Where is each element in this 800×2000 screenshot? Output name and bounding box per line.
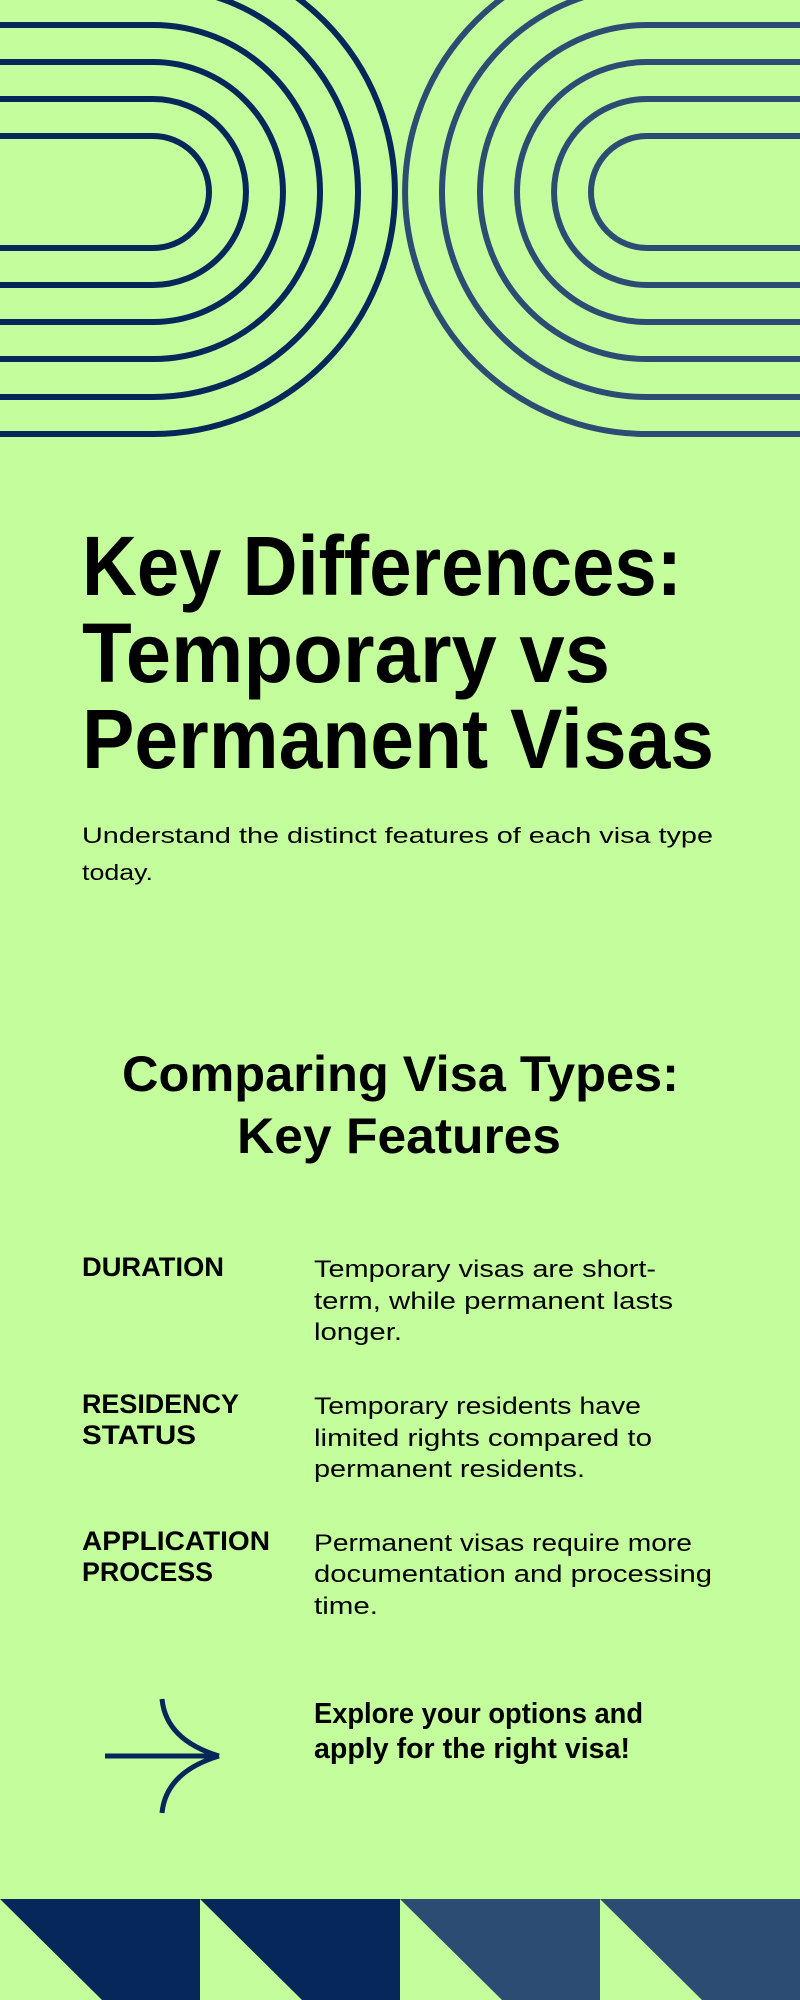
- call to action: [314, 1698, 643, 1765]
- row: duration: term, while permanent lasts: [314, 1288, 673, 1315]
- subtitle: Understand the distinct features of each visa type: [82, 823, 713, 848]
- decoration: left concentric arcs: [0, 0, 395, 434]
- call to action: apply for the right visa!: [314, 1733, 630, 1765]
- title: Permanent Visas: [82, 692, 714, 786]
- row: application process: [82, 1526, 712, 1620]
- row: residency status: Temporary residents have: [314, 1393, 641, 1420]
- title: [82, 519, 714, 786]
- section heading: [122, 1046, 679, 1164]
- call to action: Explore your options and: [314, 1698, 643, 1730]
- subtitle: today.: [82, 860, 153, 885]
- row: duration: DURATION: [82, 1252, 224, 1282]
- section heading: Comparing Visa Types:: [122, 1046, 679, 1102]
- row: application process: Permanent visas require more: [314, 1530, 692, 1557]
- row: duration: Temporary visas are short-: [314, 1256, 656, 1283]
- row: application process: PROCESS: [82, 1557, 213, 1587]
- title: Key Differences:: [82, 519, 682, 613]
- row: residency status: [82, 1389, 652, 1483]
- row: application process: APPLICATION: [82, 1526, 270, 1556]
- row: residency status: limited rights compared to: [314, 1425, 652, 1452]
- decoration: bottom triangle band: [0, 1899, 800, 2000]
- row: residency status: RESIDENCY: [82, 1389, 239, 1419]
- row: duration: longer.: [314, 1319, 402, 1346]
- title: Temporary vs: [82, 606, 610, 700]
- row: duration: [82, 1252, 673, 1346]
- subtitle: [82, 823, 713, 885]
- row: application process: time.: [314, 1593, 378, 1620]
- row: application process: documentation and processing: [314, 1561, 712, 1588]
- row: residency status: permanent residents.: [314, 1456, 585, 1483]
- section heading: Key Features: [237, 1108, 561, 1164]
- icon: arrow: [105, 1699, 219, 1813]
- row: residency status: STATUS: [82, 1420, 196, 1450]
- decoration: right concentric arcs: [405, 0, 800, 434]
